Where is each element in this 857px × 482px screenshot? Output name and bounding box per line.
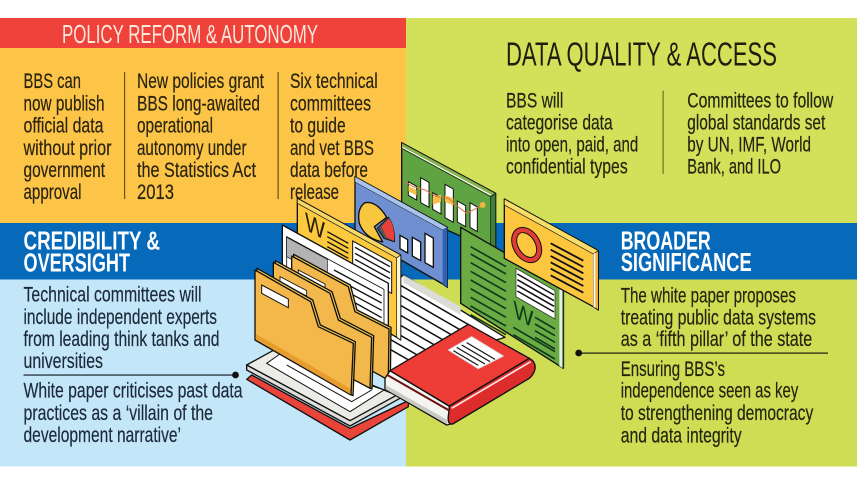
icon: front folder (255, 268, 355, 396)
text block: six technical committees: and vet BBS (290, 137, 374, 160)
heading: broader significance (621, 225, 752, 277)
icon: yellow W document: W (305, 206, 325, 246)
text block: publish without approval (23, 70, 112, 204)
icon: middle folder (273, 261, 374, 389)
text block: villain of the narrative: development narrative’ (24, 424, 181, 447)
text block: independent experts: universities (24, 350, 103, 373)
illustration: isometric documents, folders and book (247, 143, 598, 440)
text block: publish without approval: approval (24, 181, 82, 204)
panel: broader significance (406, 223, 857, 466)
heading band: policy reform: POLICY REFORM & AUTONOMY (62, 19, 318, 49)
text block: publish without approval: official data (24, 114, 104, 138)
icon: green bar chart screen (402, 143, 496, 252)
panel: data quality and access (406, 18, 857, 223)
heading: credibility and oversight: OVERSIGHT (24, 248, 130, 278)
text block: operational autonomy: New policies grant (137, 70, 264, 93)
text block: independent experts (24, 284, 220, 373)
text block: villain of the narrative: White paper criticises past data (24, 380, 243, 403)
icon: white document with gray image (282, 225, 388, 330)
icon: back folder (292, 254, 391, 381)
text block: operational autonomy: autonomy under (137, 137, 246, 160)
heading: broader significance: SIGNIFICANCE (621, 247, 752, 277)
text block: independent experts: from leading think tanks and (24, 328, 220, 351)
text block: independent experts: include independent experts (24, 306, 217, 329)
text block: six technical committees: Six technical (290, 70, 378, 93)
panel: credibility and oversight (0, 223, 406, 466)
icon: orange slide with ring (504, 199, 598, 310)
heading: credibility and oversight: CREDIBILITY & (24, 225, 160, 255)
icon: red closed book (385, 324, 535, 425)
text block: global standards (687, 89, 834, 178)
text block: villain of the narrative (24, 380, 243, 447)
text block: democracy and integrity: Ensuring BBS’s (621, 358, 725, 381)
text block: publish without approval: BBS can (24, 70, 81, 93)
text block: six technical committees: committees (290, 92, 371, 116)
text block: operational autonomy: operational (137, 114, 213, 138)
text block: six technical committees: to guide (290, 114, 346, 138)
text block: democracy and integrity: and data integrity (621, 424, 742, 447)
heading: broader significance: BROADER (621, 225, 711, 255)
text block: operational autonomy: 2013 (137, 181, 174, 204)
text block: independent experts: Technical committees will (24, 284, 202, 307)
icon: green text document (461, 227, 563, 368)
text block: operational autonomy (137, 70, 264, 204)
icon: stacked tray with red base (247, 347, 408, 440)
text block: data categories: BBS will (506, 89, 563, 112)
text block: data categories: categorise data (506, 111, 613, 134)
text block: six technical committees: data before (290, 159, 368, 182)
text block: villain of the narrative: practices as a ‘villain of the (24, 402, 213, 425)
callout line: right (575, 350, 828, 356)
text block: data categories: into open, paid, and (506, 134, 638, 156)
text block: data categories: confidential types (506, 155, 628, 178)
text block: publish without approval: government (24, 159, 105, 182)
callout line: left (24, 372, 239, 378)
heading: credibility and oversight (24, 225, 160, 278)
icon: green text document: W (513, 296, 534, 334)
icon: blue pie chart screen (355, 177, 447, 287)
text block: publish without approval: without prior (23, 137, 112, 160)
text block: operational autonomy: the Statistics Act (137, 159, 256, 182)
text block: democracy and integrity (621, 358, 814, 447)
icon: yellow W document (297, 198, 401, 340)
text block: six technical committees: release (290, 181, 339, 204)
icon: open white document pages (391, 274, 506, 370)
text block: six technical committees (290, 70, 378, 204)
text block: global standards: Bank, and ILO (687, 155, 781, 178)
text block: operational autonomy: BBS long-awaited (137, 92, 260, 116)
text block: data categories (506, 89, 638, 178)
text block: publish without approval: now publish (24, 92, 104, 116)
panel: policy reform and autonomy (0, 18, 406, 223)
text block: fifth pillar (621, 284, 816, 351)
text block: fifth pillar: The white paper proposes (621, 284, 796, 307)
text block: global standards: by UN, IMF, World (687, 134, 811, 156)
